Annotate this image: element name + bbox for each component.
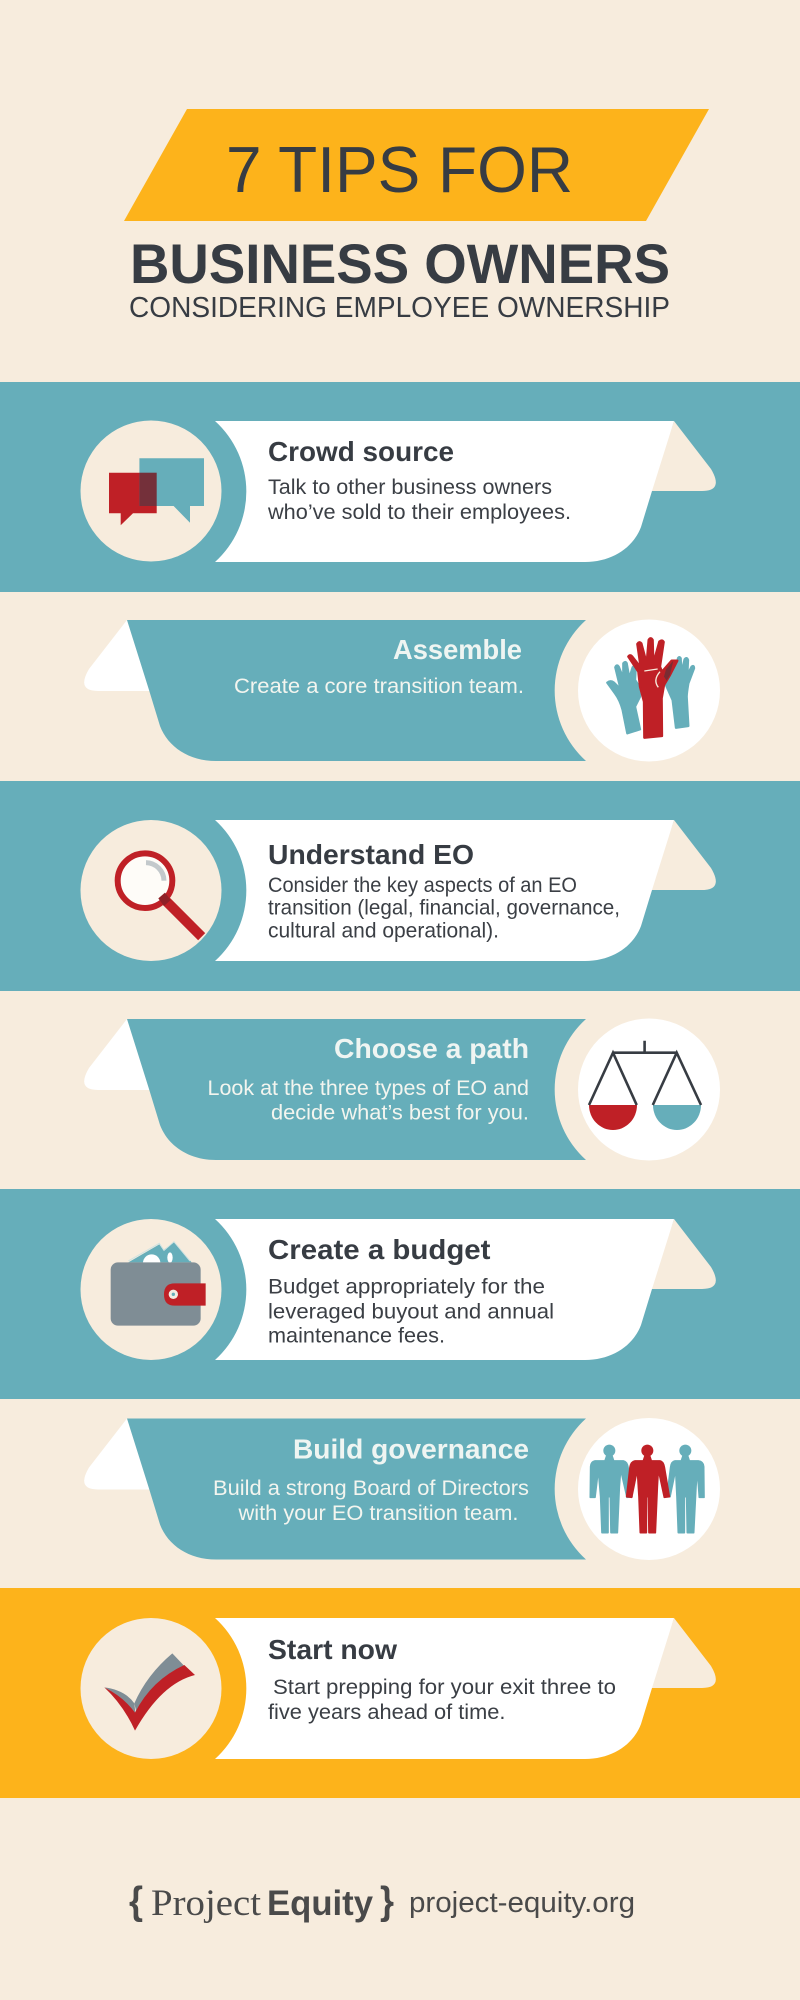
body text: Look at the three types of EO and (208, 1077, 529, 1100)
icon circle (80, 1618, 222, 1759)
icon: check mark (104, 1653, 195, 1731)
ribbon fold (650, 1219, 716, 1289)
icon circle (578, 1418, 720, 1560)
ribbon fold (650, 421, 716, 491)
white ribbon (215, 820, 674, 961)
icon circle (578, 620, 720, 762)
ribbon fold (84, 1019, 150, 1090)
body text: with your EO transition team. (237, 1502, 518, 1525)
body text (268, 1276, 554, 1348)
panel: create a budget (0, 1189, 800, 1399)
ribbon fold (84, 620, 150, 691)
heading: Crowd source (268, 436, 454, 467)
body text (208, 1077, 529, 1124)
panel: start now (0, 1588, 800, 1798)
body text: decide what’s best for you. (271, 1102, 529, 1124)
icon: three people (590, 1445, 704, 1533)
body text (268, 1676, 616, 1724)
teal ribbon (127, 1418, 586, 1560)
icon: wallet (111, 1242, 206, 1326)
ribbon fold (650, 1618, 716, 1688)
icon circle (80, 820, 222, 961)
body text: Talk to other business owners (268, 476, 552, 499)
body text: Create a core transition team. (234, 675, 524, 698)
body text: maintenance fees. (268, 1324, 445, 1348)
white ribbon (215, 421, 674, 562)
body text: Budget appropriately for the (268, 1276, 545, 1298)
title block (124, 109, 709, 324)
body text (213, 1477, 529, 1525)
heading: business owners: BUSINESS OWNERS (130, 232, 670, 295)
icon: raised hands (607, 638, 694, 738)
panel: crowd source (0, 382, 800, 592)
body text: leveraged buyout and annual (268, 1300, 554, 1324)
body text (267, 476, 571, 524)
body text: Consider the key aspects of an EO (268, 874, 577, 897)
teal ribbon (127, 620, 586, 761)
body text (268, 874, 620, 942)
logo: project equity (129, 1880, 394, 1924)
subheading: CONSIDERING EMPLOYEE OWNERSHIP (129, 292, 670, 324)
icon: speech bubbles (109, 458, 204, 525)
logo: project equity: Project (151, 1883, 262, 1924)
website url: project-equity.org (409, 1887, 635, 1919)
ribbon fold (650, 820, 716, 890)
heading: Assemble (393, 634, 522, 665)
teal ribbon (127, 1019, 586, 1160)
heading: Build governance (293, 1434, 529, 1464)
title banner (124, 109, 709, 221)
body text: Start prepping for your exit three to (273, 1676, 616, 1699)
white ribbon (215, 1618, 674, 1759)
logo: project equity: } (380, 1880, 394, 1923)
logo: project equity: { (129, 1880, 143, 1923)
ribbon fold (84, 1418, 150, 1490)
heading: Create a budget (268, 1234, 490, 1265)
white ribbon (215, 1219, 674, 1360)
body text: five years ahead of time. (268, 1701, 506, 1724)
icon circle (80, 1219, 222, 1360)
icon: balance scales (589, 1041, 701, 1130)
heading: Choose a path (334, 1033, 529, 1064)
icon circle (578, 1018, 720, 1160)
panel: choose a path (84, 1018, 720, 1160)
heading: Understand EO (268, 839, 474, 870)
body text: cultural and operational). (268, 920, 499, 942)
heading: 7 tips for: 7 TIPS FOR (226, 133, 573, 206)
icon circle (80, 420, 222, 562)
panel: assemble (84, 620, 720, 762)
panel: build governance (84, 1418, 720, 1560)
logo: project equity: Equity (267, 1884, 374, 1923)
panel: understand EO (0, 781, 800, 991)
body text: Build a strong Board of Directors (213, 1477, 529, 1500)
body text: transition (legal, financial, governance, (268, 896, 620, 920)
body text: who’ve sold to their employees. (267, 501, 571, 524)
heading: Start now (268, 1634, 397, 1665)
icon: magnifying glass (118, 853, 202, 937)
